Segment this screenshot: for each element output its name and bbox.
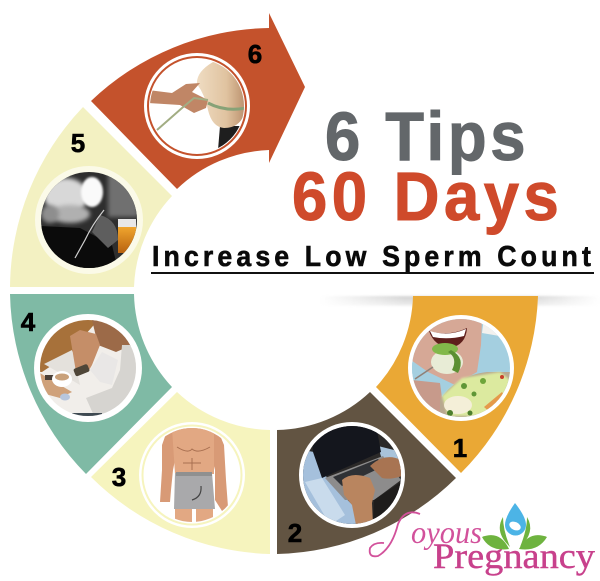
photo: measuring waist: [150, 62, 244, 148]
segment 5: smoking and alcohol: [10, 107, 172, 287]
logo text: Pregnancy: Pregnancy: [433, 536, 595, 576]
logo icon: drop and leaves: [482, 503, 547, 550]
logo: Joyous Pregnancy: [370, 503, 595, 576]
photo: hands on laptop: [300, 425, 405, 525]
photo: smoke and beer: [40, 170, 140, 270]
photo: stressed man at desk: [38, 318, 138, 418]
segment 4: stress: [10, 294, 172, 474]
number 5: 5: [71, 128, 85, 158]
logo swash: J: [370, 512, 420, 556]
number 6: 6: [248, 39, 262, 69]
number 1: 1: [453, 433, 467, 463]
number 4: 4: [21, 307, 36, 337]
segment 3: underwear: [91, 392, 270, 554]
title: 60 Days: 60 Days: [292, 159, 559, 236]
logo text: oyous: oyous: [411, 514, 482, 550]
subtitle underline: [151, 272, 594, 274]
title: 6 Tips: 6 Tips: [325, 99, 526, 176]
photo: man eating salad: [411, 318, 512, 420]
segment 1: diet: [376, 296, 538, 473]
illustration: male torso in shorts: [160, 428, 228, 523]
segment 6: arrow, weight: [91, 13, 305, 189]
segment 2: laptop: [277, 392, 456, 554]
number 2: 2: [288, 518, 302, 548]
shadow fade: [310, 297, 600, 311]
subtitle: Increase Low Sperm Count: [152, 240, 591, 272]
shadow under subtitle: [320, 296, 600, 306]
number 3: 3: [112, 462, 126, 492]
